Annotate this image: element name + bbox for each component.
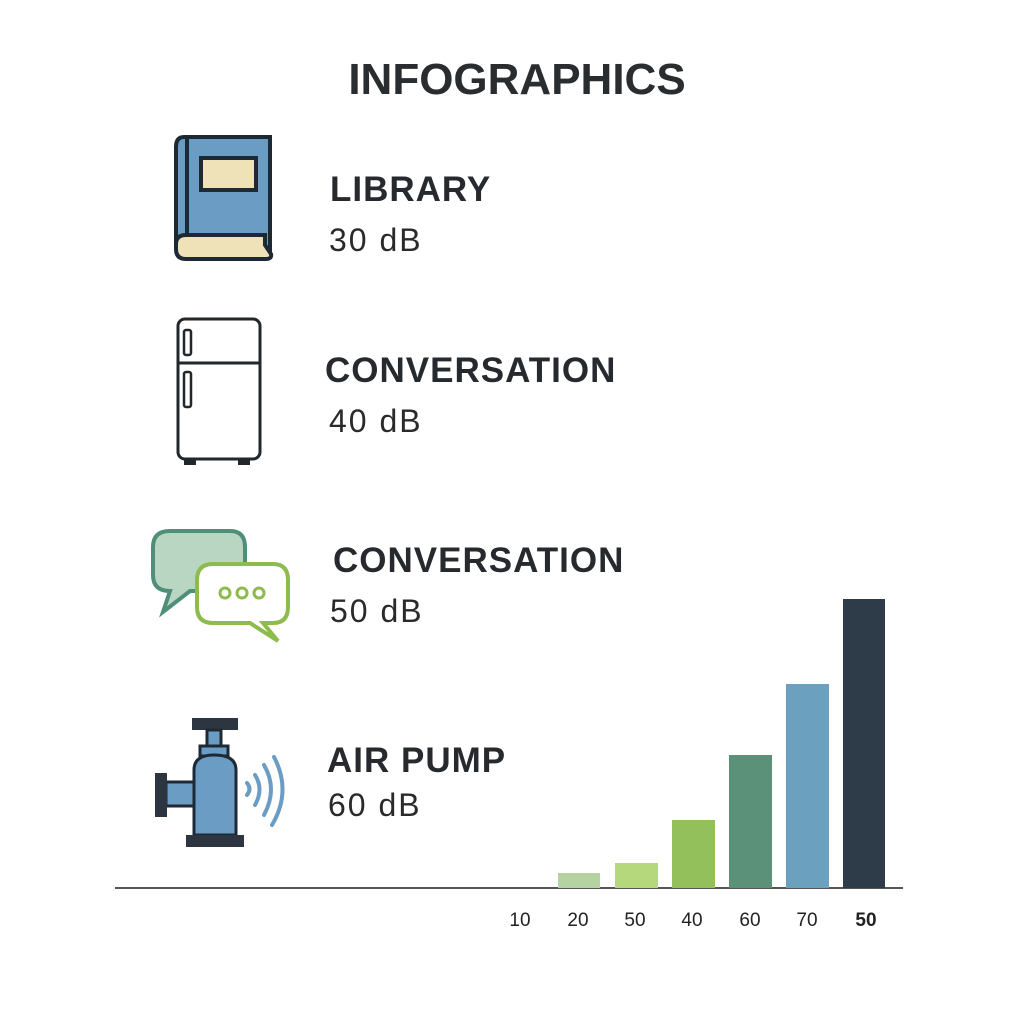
icon: air pump (155, 718, 285, 847)
bar chart: 60 (739, 910, 761, 931)
value: 40 dB: 40 dB (329, 403, 423, 439)
bar chart: 10 (509, 910, 531, 931)
bar chart: 20 (567, 910, 589, 931)
label: conversation 2: CONVERSATION (333, 541, 624, 580)
value: 50 dB: 50 dB (330, 593, 424, 629)
label: air pump: AIR PUMP (327, 741, 506, 780)
bar chart: 50 (624, 910, 646, 931)
icon: fridge (176, 318, 262, 465)
icon: book (174, 135, 274, 261)
label: conversation 1: CONVERSATION (325, 351, 616, 390)
title: INFOGRAPHICS (348, 55, 686, 104)
bar chart: 70 (796, 910, 818, 931)
label: library: LIBRARY (330, 170, 491, 209)
bar chart: 50 (855, 910, 877, 931)
bar chart: 40 (681, 910, 703, 931)
icon: speech bubbles (151, 529, 290, 643)
value: 30 dB: 30 dB (329, 222, 423, 258)
value: 60 dB: 60 dB (328, 787, 422, 823)
bar chart (115, 599, 903, 931)
